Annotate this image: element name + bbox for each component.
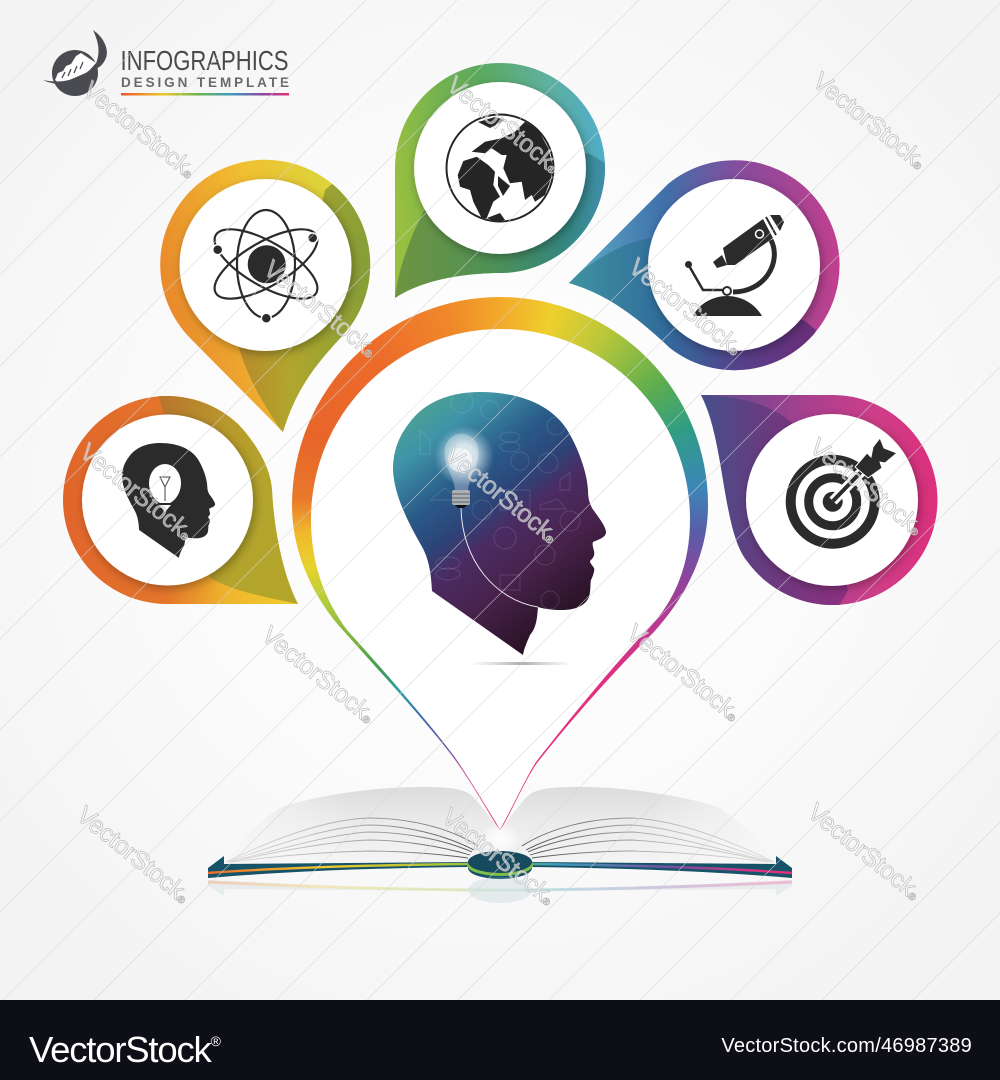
faint pattern icons (420, 391, 580, 609)
watermarks: VectorStock® (258, 255, 383, 364)
pin: microscope (569, 160, 840, 370)
reflection (208, 877, 792, 903)
head illustration (393, 391, 606, 655)
footer brand: VectorStock® (29, 1029, 220, 1070)
logo mark (43, 30, 107, 96)
pin: head idea (63, 396, 298, 604)
watermarks: VectorStock® (441, 71, 566, 180)
right page (500, 787, 728, 852)
logo (43, 30, 289, 96)
spine (468, 857, 532, 879)
footer band (0, 1000, 1000, 1080)
main pin with rainbow ring (292, 297, 708, 830)
watermarks: VectorStock® (71, 801, 196, 910)
cover (208, 856, 468, 878)
logo: DESIGN TEMPLATE (121, 75, 289, 90)
watermarks: VectorStock® (804, 433, 929, 542)
watermarks: VectorStock® (623, 253, 748, 362)
head shadow (470, 662, 573, 665)
pin: atom (160, 160, 385, 440)
watermarks: VectorStock® (439, 441, 564, 550)
left page (272, 787, 500, 852)
watermarks: VectorStock® (77, 76, 202, 185)
logo: INFOGRAPHICS (120, 45, 288, 76)
icon: globe (446, 114, 554, 222)
pin: globe (395, 63, 605, 298)
watermarks: VectorStock® (74, 438, 199, 547)
watermarks: VectorStock® (807, 67, 932, 176)
watermarks: VectorStock® (802, 798, 927, 907)
icon: microscope (685, 215, 784, 316)
page lines (226, 818, 478, 862)
footer url: VectorStock.com/46987389 (721, 1035, 972, 1057)
watermarks (71, 67, 932, 912)
pin: target (700, 395, 937, 612)
watermarks: VectorStock® (256, 621, 381, 730)
light bulb (434, 426, 538, 607)
open book (208, 787, 792, 903)
icon: target with arrow (791, 438, 897, 544)
icon: head with bulb (122, 443, 215, 558)
tip glow (480, 822, 520, 854)
watermarks: VectorStock® (436, 803, 561, 912)
icon: atom (205, 210, 327, 323)
watermarks: VectorStock® (621, 619, 746, 728)
